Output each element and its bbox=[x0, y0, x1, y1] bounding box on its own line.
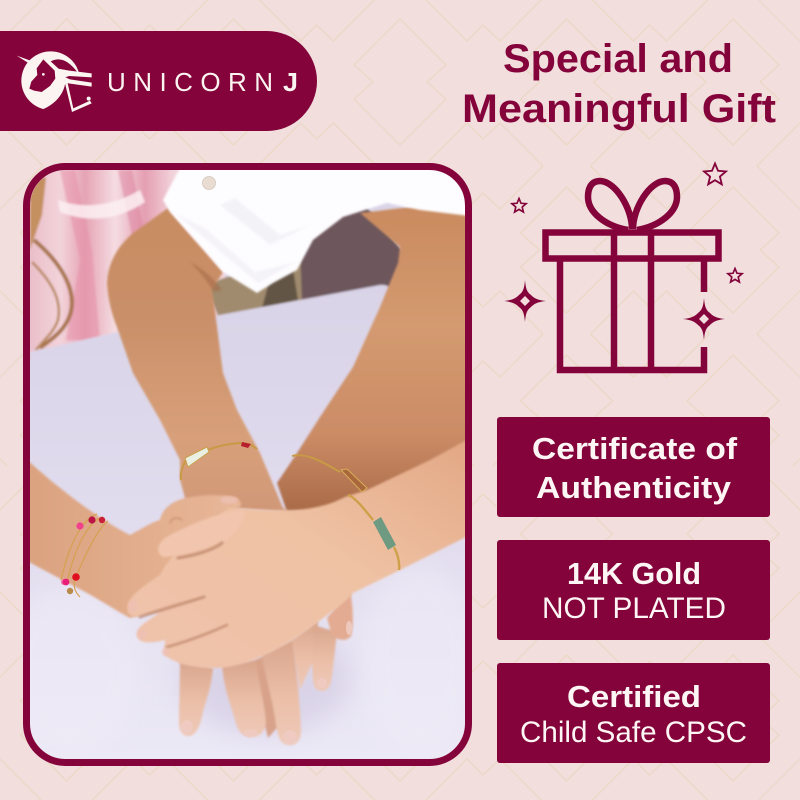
shirt button bbox=[202, 176, 216, 190]
main hand and forearm bbox=[128, 438, 470, 668]
panel: certificate of authenticity bbox=[497, 417, 770, 517]
icon: sparkle right bbox=[683, 298, 725, 340]
icon: small star left bbox=[512, 198, 526, 212]
panel: certified child safe: Child Safe CPSC bbox=[520, 716, 747, 749]
lower fingers bbox=[179, 590, 353, 745]
light patches on sheet bbox=[0, 565, 480, 755]
title: Meaningful Gift bbox=[462, 87, 776, 131]
left arm and hand bbox=[25, 458, 250, 618]
panel: certificate of authenticity: Certificate of bbox=[532, 431, 738, 466]
panel: 14K gold: NOT PLATED bbox=[542, 592, 726, 625]
bracelet: gold bar bbox=[292, 455, 367, 492]
fingertips tint bbox=[128, 496, 238, 656]
bracelet: green stone bar bbox=[348, 495, 399, 570]
photo backdrop bbox=[25, 165, 470, 765]
panel: certificate of authenticity: Authenticity bbox=[536, 470, 732, 505]
overlapping index finger bbox=[158, 511, 245, 557]
panel: certified child safe: Certified bbox=[567, 679, 701, 714]
title: Special and bbox=[503, 37, 733, 81]
white shirt bbox=[163, 165, 470, 293]
right forearm bbox=[277, 200, 470, 512]
logo banner bbox=[0, 31, 317, 131]
fingernails bbox=[181, 621, 352, 744]
icon: gift box with stars and sparkles bbox=[504, 164, 742, 370]
finger shadows bbox=[140, 518, 227, 647]
gift box outline bbox=[546, 181, 718, 370]
icon: large star bbox=[704, 164, 726, 184]
bracelet: mother of pearl bar bbox=[181, 442, 257, 480]
panel: 14K gold bbox=[497, 540, 770, 640]
icon: sparkle left bbox=[504, 280, 546, 322]
icon: small star right bbox=[728, 268, 742, 282]
panel: 14K gold: 14K Gold bbox=[567, 556, 701, 591]
brand name: J bbox=[283, 67, 298, 97]
photo panel: children's hands with bracelets bbox=[0, 165, 480, 765]
photo frame bbox=[26, 166, 468, 762]
brand name: UNICORN bbox=[107, 67, 273, 97]
bent left forearm bbox=[107, 208, 290, 512]
bracelet: enamel hearts bbox=[61, 514, 108, 597]
panel: certified child safe bbox=[497, 663, 770, 763]
hand shadow on sheet bbox=[204, 653, 349, 736]
icon: unicorn head logo bbox=[17, 51, 105, 122]
title bbox=[462, 37, 776, 131]
